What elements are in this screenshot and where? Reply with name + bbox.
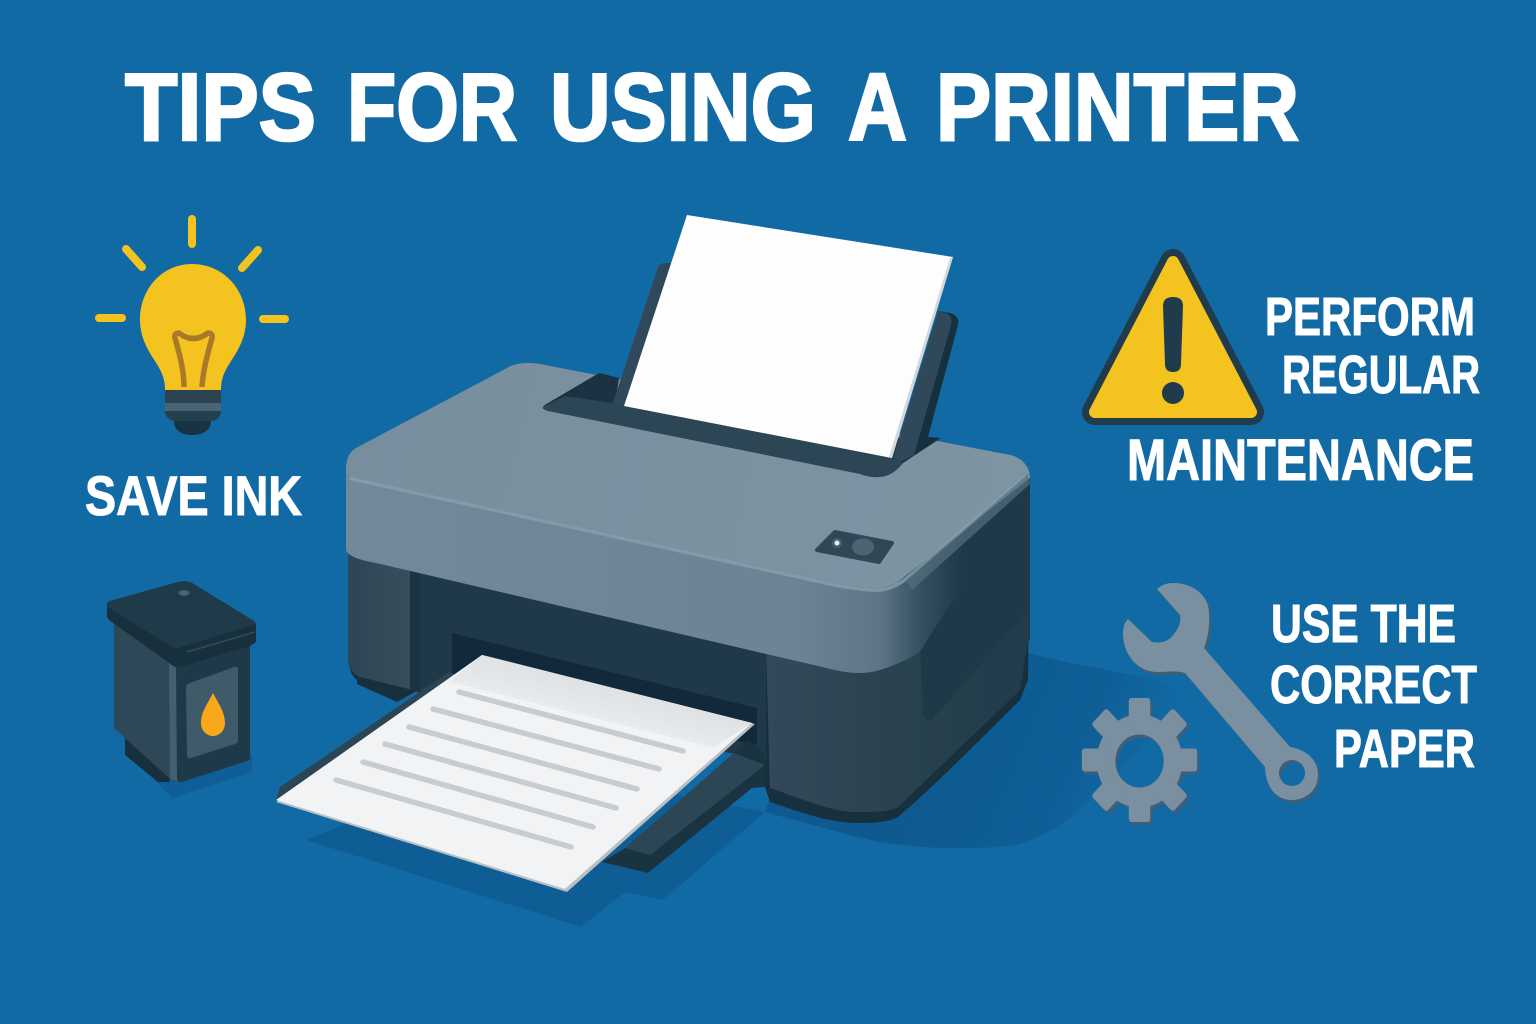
title: TIPS bbox=[125, 54, 316, 161]
icon: ink cartridge bbox=[107, 581, 256, 798]
right pillar bbox=[766, 610, 1028, 812]
printer bbox=[276, 215, 1179, 927]
label: use the correct paper: CORRECT bbox=[1270, 655, 1477, 715]
label: use the correct paper: PAPER bbox=[1334, 719, 1475, 779]
paper support bbox=[613, 263, 958, 462]
paper slot bbox=[543, 373, 941, 477]
icon: wrench bbox=[1123, 583, 1318, 800]
icon: gear bbox=[1082, 698, 1197, 822]
front wall and recess bbox=[420, 560, 766, 760]
control panel bbox=[817, 532, 892, 562]
output tray bbox=[276, 672, 765, 873]
title: USING bbox=[550, 54, 816, 161]
printer top bbox=[346, 363, 1030, 588]
icon: light bulb bbox=[99, 219, 285, 435]
icon: warning triangle bbox=[1095, 262, 1251, 412]
printer shadow bbox=[306, 653, 1179, 927]
title: A bbox=[848, 54, 905, 161]
label: save ink: SAVE INK bbox=[85, 464, 302, 527]
output paper bbox=[276, 655, 755, 892]
label: perform regular maintenance: PERFORM bbox=[1265, 287, 1475, 347]
left pillar bbox=[348, 540, 413, 690]
label: perform regular maintenance bbox=[1127, 287, 1480, 493]
title: FOR bbox=[347, 54, 517, 161]
paper text lines bbox=[336, 692, 683, 847]
label: use the correct paper: USE THE bbox=[1271, 594, 1456, 654]
printer front band bbox=[346, 470, 1030, 673]
top paper bbox=[624, 215, 953, 458]
printer body bbox=[348, 480, 1030, 823]
label: use the correct paper bbox=[1270, 594, 1477, 779]
title: PRINTER bbox=[936, 54, 1299, 161]
